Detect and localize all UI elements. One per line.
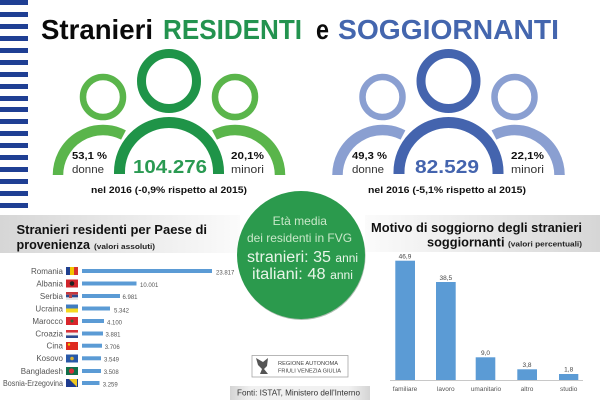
categories: studio bbox=[560, 386, 578, 393]
stats: soggiornanti bbox=[352, 151, 544, 195]
categories: umanitario bbox=[471, 386, 502, 393]
country labels: Croazia bbox=[35, 330, 64, 338]
stats: soggiornanti: 22,1% bbox=[511, 151, 544, 162]
country labels: Albania bbox=[36, 280, 64, 288]
panel heading: motivo di soggiorno: (valori percentuali) bbox=[508, 242, 582, 249]
person left bbox=[58, 77, 124, 175]
callout: età media bbox=[237, 191, 366, 320]
panel heading: motivo di soggiorno bbox=[365, 215, 600, 252]
logo: regione autonoma: FRIULI VENEZIA GIULIA bbox=[278, 368, 342, 374]
stats: soggiornanti: donne bbox=[352, 164, 384, 176]
person centre bbox=[120, 54, 218, 174]
panel heading: motivo di soggiorno: soggiornanti bbox=[427, 235, 504, 250]
bar chart: paesi di provenienza bbox=[3, 267, 235, 388]
country labels: Cina bbox=[47, 342, 64, 350]
country labels: Bangladesh bbox=[21, 367, 63, 376]
person right bbox=[214, 77, 280, 175]
stats: soggiornanti: minori bbox=[511, 164, 544, 176]
values: 1,8 bbox=[564, 366, 574, 374]
bar chart: motivo di soggiorno bbox=[390, 254, 583, 393]
values: 6.981 bbox=[122, 295, 138, 301]
panel heading: stranieri residenti: (valori assoluti) bbox=[94, 244, 155, 251]
categories bbox=[393, 386, 578, 393]
country labels bbox=[3, 267, 64, 388]
stats: residenti: 20,1% bbox=[231, 151, 264, 162]
panel heading: motivo di soggiorno: Motivo di soggiorno degli stranieri bbox=[371, 220, 582, 235]
categories: familiare bbox=[393, 386, 418, 393]
stats: residenti: nel 2016 (-0,9% rispetto al 2015) bbox=[91, 185, 247, 195]
values: 3.706 bbox=[105, 345, 120, 351]
values: 38,5 bbox=[439, 275, 453, 282]
values: 23.817 bbox=[216, 270, 235, 276]
person right bbox=[494, 77, 560, 175]
values: 46,9 bbox=[399, 254, 412, 260]
values: 3,8 bbox=[522, 362, 532, 369]
country labels: Ucraina bbox=[35, 304, 64, 314]
country labels: Kosovo bbox=[36, 354, 64, 363]
country labels: Marocco bbox=[32, 317, 64, 326]
stats: soggiornanti: 49,3 % bbox=[352, 151, 387, 162]
callout: età media: Età media bbox=[273, 214, 327, 228]
stats: residenti: minori bbox=[231, 164, 264, 176]
person centre bbox=[399, 54, 498, 174]
country labels: Serbia bbox=[40, 292, 64, 301]
stats: residenti: 104.276 bbox=[133, 157, 207, 177]
callout: età media: stranieri: 35 anni bbox=[247, 249, 358, 266]
icon group: residenti bbox=[58, 54, 280, 175]
values: 10.001 bbox=[140, 283, 159, 289]
panel heading: stranieri residenti: provenienza bbox=[16, 237, 91, 252]
title: Stranieri bbox=[41, 14, 153, 45]
values: 5.342 bbox=[114, 308, 130, 314]
title: e bbox=[316, 14, 329, 45]
values: 3.508 bbox=[104, 370, 119, 376]
values: 3.549 bbox=[104, 358, 120, 364]
stats: residenti: 53,1 % bbox=[72, 151, 107, 162]
title bbox=[41, 14, 559, 45]
callout: età media: dei residenti in FVG bbox=[247, 231, 352, 245]
stats: residenti: donne bbox=[72, 164, 104, 176]
bars bbox=[395, 261, 578, 380]
values bbox=[103, 270, 235, 388]
decorative stripes bbox=[0, 0, 28, 208]
values: 4.100 bbox=[107, 320, 123, 326]
values bbox=[399, 254, 574, 374]
icon: eagle bbox=[256, 358, 268, 374]
country labels: Bosnia-Erzegovina bbox=[3, 379, 63, 388]
stats: residenti bbox=[72, 151, 264, 195]
footer: fonti: Fonti: ISTAT, Ministero dell'Interno bbox=[237, 388, 361, 398]
stats: soggiornanti: 82.529 bbox=[415, 157, 479, 177]
bars bbox=[82, 269, 212, 385]
footer: fonti bbox=[230, 386, 370, 400]
icon group: soggiornanti bbox=[338, 54, 560, 175]
title: RESIDENTI bbox=[163, 14, 302, 45]
panel heading: stranieri residenti: Stranieri residenti per Paese di bbox=[16, 222, 207, 237]
logo: regione autonoma: REGIONE AUTONOMA bbox=[278, 361, 339, 367]
person left bbox=[338, 77, 403, 175]
flags bbox=[66, 267, 78, 387]
stats: soggiornanti: nel 2016 (-5,1% rispetto al 2015) bbox=[368, 185, 526, 195]
logo: regione autonoma bbox=[252, 356, 348, 377]
values: 3.881 bbox=[106, 332, 121, 338]
callout: età media: italiani: 48 anni bbox=[252, 266, 353, 283]
values: 3.259 bbox=[103, 382, 118, 388]
panel heading: stranieri residenti bbox=[0, 215, 240, 253]
title: SOGGIORNANTI bbox=[338, 14, 559, 45]
country labels: Romania bbox=[31, 267, 64, 276]
categories: lavoro bbox=[437, 386, 455, 393]
values: 9,0 bbox=[481, 350, 490, 357]
categories: altro bbox=[521, 386, 534, 393]
